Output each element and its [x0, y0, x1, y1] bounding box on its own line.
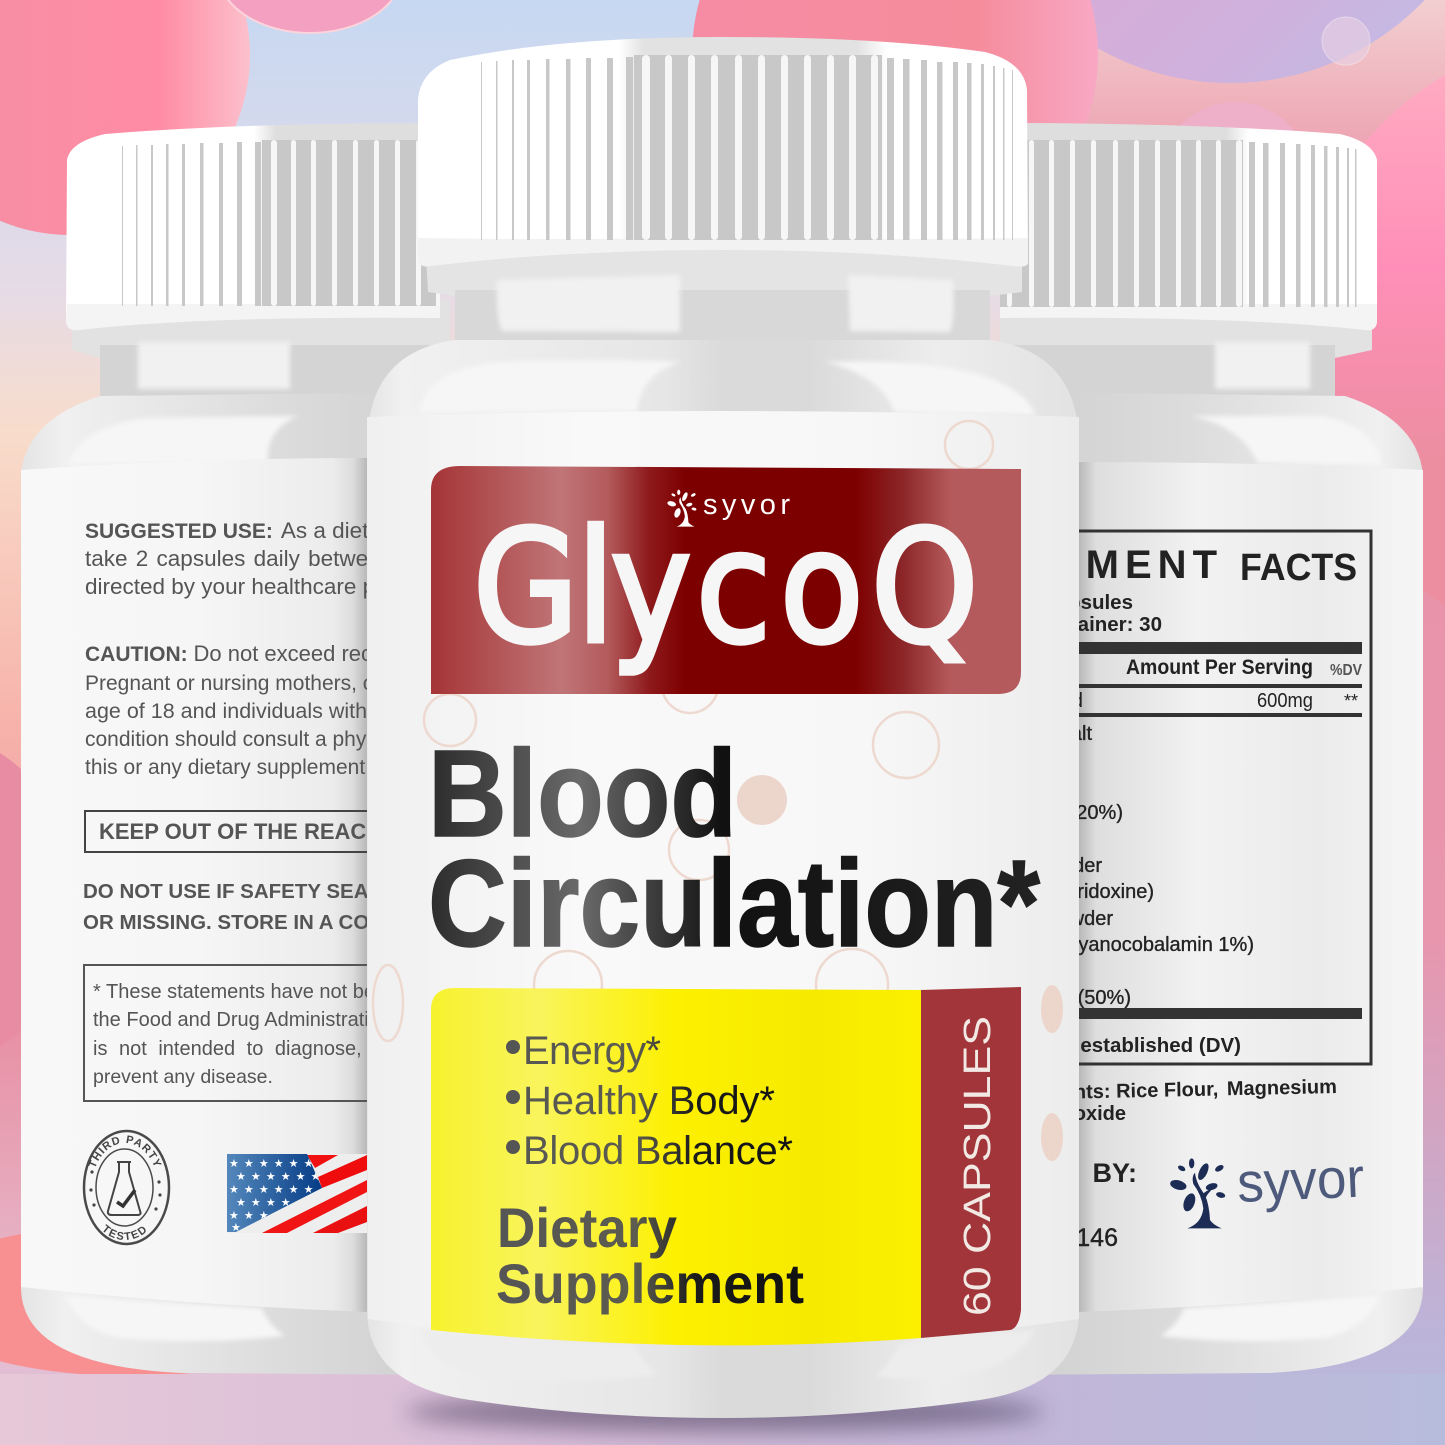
other ingredients: Other Ingredients: Rice Flour, Magnesium	[937, 1076, 1337, 1106]
shoulder highlights	[420, 360, 680, 412]
ingredient list: Cayenne Powder	[949, 855, 1102, 877]
proprietary blend row: **	[1344, 691, 1358, 711]
benefit list: Energy*	[523, 1029, 661, 1073]
product name: GlycoQ	[473, 498, 978, 678]
caution: condition should consult a physician	[85, 728, 420, 751]
decorative circles	[373, 421, 993, 1041]
yellow benefits panel	[431, 988, 921, 1345]
caution	[85, 645, 367, 778]
facts title: SUPPLEMENT	[890, 543, 1223, 587]
benefit list: Blood Balance*	[523, 1129, 793, 1173]
ingredient list	[1079, 724, 1253, 1008]
serving info: Serving Size: 2 Capsules	[890, 591, 1133, 614]
disclaimer box: the Food and Drug Administration. This product	[93, 1009, 512, 1031]
label paper	[367, 411, 1079, 1344]
icon: american flag: ★ ★ ★ ★ ★ ★	[236, 1171, 321, 1183]
other ingredients	[1079, 1079, 1336, 1120]
base highlights	[420, 1330, 657, 1381]
right label: supplement facts: **Daily Value not established (DV)	[913, 1034, 1241, 1057]
headline: Blood	[428, 726, 737, 863]
caution: age of 18 and individuals with a known	[85, 699, 453, 723]
ingredient list: Bitter Melon (20%)	[957, 802, 1123, 824]
right back bottle	[1000, 123, 1423, 1374]
logo: syvor	[1169, 1146, 1365, 1228]
caution: this or any dietary supplement.	[85, 756, 371, 779]
left bottle cap	[66, 123, 440, 330]
bottle body	[367, 340, 1079, 1418]
icon: american flag: ★ ★ ★ ★	[236, 1197, 291, 1209]
proprietary blend row: 600mg	[1257, 690, 1313, 712]
facts title	[1088, 550, 1356, 580]
center bottle	[367, 37, 1079, 1418]
icon: tree	[1169, 1158, 1226, 1228]
neck	[425, 240, 1022, 347]
dietary supplement	[496, 1196, 804, 1315]
icon: american flag: ★	[231, 1222, 241, 1234]
logo: syvor	[667, 489, 790, 527]
right bottle cap	[1000, 123, 1377, 330]
right bottle base highlight	[1160, 1296, 1380, 1341]
icon: american flag: ★ ★ ★ ★ ★ ★	[229, 1184, 314, 1196]
icon: tree	[667, 490, 697, 527]
ingredient list: B12 (Cyanocobalamin 1%)	[1016, 934, 1254, 956]
manufacturer	[1079, 1164, 1134, 1246]
safety seal warning: DO NOT USE IF SAFETY SEAL IS DAMAGED	[83, 880, 517, 903]
keep out of reach box: KEEP OUT OF THE REACH OF CHILDREN	[99, 819, 539, 844]
icon: third party tested badge	[82, 1130, 170, 1246]
headline	[428, 726, 1040, 973]
cap	[418, 37, 1028, 266]
suggested use: SUGGESTED USE: As a dietary supplement	[85, 518, 523, 543]
left bottle base highlight	[65, 1296, 285, 1341]
ingredient list: Extract (50%)	[1010, 987, 1131, 1009]
capsule count band: 60 CAPSULES	[957, 1016, 999, 1316]
left bottle label paper	[21, 458, 367, 1312]
wordmark: syvor	[1236, 1146, 1365, 1214]
table header: Amount Per Serving	[1126, 656, 1313, 679]
serving info: Servings Per Container: 30	[900, 613, 1162, 636]
ingredient list: Berberine HCl Salt	[926, 723, 1092, 745]
disclaimer box: prevent any disease.	[93, 1066, 273, 1088]
table header: %DV	[1330, 662, 1362, 679]
benefit list: Healthy Body*	[523, 1079, 775, 1123]
icon: third party tested badge: TESTED	[104, 1224, 146, 1240]
safety seal warning: OR MISSING. STORE IN A COOL DRY PLACE	[83, 911, 520, 934]
keep out of reach box	[84, 810, 367, 853]
safety seal warning	[84, 884, 367, 929]
other ingredients: Silicon Dioxide	[983, 1103, 1126, 1125]
caution: CAUTION: Do not exceed recommended dose	[85, 641, 536, 666]
caution: Pregnant or nursing mothers, children	[85, 672, 436, 695]
icon: american flag: ★ ★ ★ ★ ★ ★	[229, 1158, 314, 1170]
dietary supplement: Dietary	[497, 1196, 677, 1259]
icon: third party tested badge: THIRD PARTY	[88, 1135, 162, 1166]
capsule count band	[921, 987, 1021, 1338]
suggested use	[85, 522, 367, 598]
right label: supplement facts	[1079, 530, 1372, 1246]
icon: american flag	[227, 1154, 368, 1234]
cap ridges	[642, 55, 878, 240]
cap grooves	[481, 55, 1013, 240]
benefit list	[506, 1029, 793, 1173]
brand panel	[431, 466, 1021, 694]
disclaimer box	[83, 964, 367, 1102]
left back bottle	[21, 123, 450, 1374]
left label text	[82, 522, 367, 1246]
manufacturer: MADE BY:	[994, 1158, 1137, 1188]
ingredient list: Ginger Powder	[980, 908, 1113, 930]
wordmark: syvor	[703, 489, 790, 521]
suggested use: take 2 capsules daily between meals	[85, 546, 461, 571]
disclaimer box: * These statements have not been evaluated by	[93, 981, 516, 1003]
left bottle neck and body	[21, 300, 450, 1375]
serving info	[1079, 594, 1162, 631]
icon: american flag: ★ ★ ★	[229, 1210, 269, 1222]
facts title: FACTS	[1240, 547, 1357, 589]
disclaimer box: is not intended to diagnose, treat, cure or	[93, 1038, 499, 1060]
right bottle label paper	[1079, 462, 1423, 1312]
ingredient list: B6 (Pyridoxine)	[1017, 881, 1154, 903]
right bottle neck and body	[1000, 300, 1423, 1375]
dietary supplement: Supplement	[496, 1252, 804, 1315]
suggested use: directed by your healthcare professional	[85, 574, 484, 599]
manufacturer: Ste 100146	[990, 1224, 1118, 1252]
proprietary blend row: Proprietary Blend	[928, 690, 1083, 712]
proprietary blend row	[1079, 692, 1358, 711]
headline: Circulation*	[428, 836, 1040, 973]
shadow under center bottle	[405, 1392, 1045, 1432]
